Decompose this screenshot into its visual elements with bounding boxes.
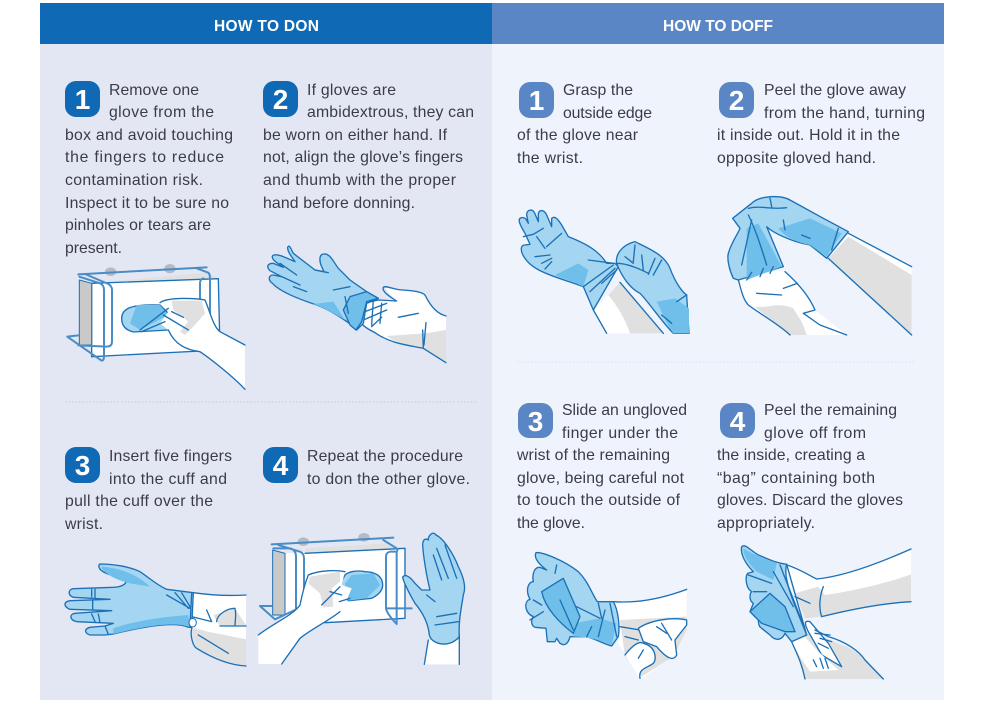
don step 1 text: pinholes or tears are [65,217,211,234]
illustration: aligning glove with hand [265,246,446,363]
doff step 2 text: from the hand, turning [764,105,925,122]
doff step 4 text: glove off from [764,425,866,442]
doff step 4 text: gloves. Discard the gloves [717,492,903,509]
illustration: grasping glove edge at wrist [519,210,689,333]
doff step 4 text: the inside, creating a [717,447,865,464]
don step 3 text: pull the cuff over the [65,493,213,510]
doff step 4 text: 4 [730,406,746,437]
doff step 1 text: of the glove near [517,127,638,144]
doff step 2 text: Peel the glove away [764,82,906,99]
don step 1 text [65,81,233,257]
doff step 3 text: the glove. [517,515,585,532]
don step 1 text: Inspect it to be sure no [65,195,229,212]
don step 2 text: ambidextrous, they can [307,104,474,121]
doff step 4 text [717,402,903,532]
doff step 3 text: to touch the outside of [517,492,681,509]
don step 3 text [64,447,232,533]
doff step 2 text [717,82,925,167]
heading: how to don: HOW TO DON [214,18,319,35]
doff step 2 text: it inside out. Hold it in the [717,127,900,144]
don step 3 text: wrist. [64,516,103,533]
doff step 4 text: Peel the remaining [764,402,897,419]
heading: how to don [40,3,492,44]
doff step 2 text: opposite gloved hand. [717,150,876,167]
doff step 3 text: 3 [528,406,543,437]
don step 2 text: be worn on either hand. If [263,127,448,144]
illustration: pulling cuff over wrist [65,564,246,666]
don step 1 text: box and avoid touching [65,127,233,144]
don step 3 text: Insert five fingers [109,448,232,465]
don step 2 text [263,81,474,212]
doff step 3 text: glove, being careful not [517,470,685,487]
doff step 1 text: Grasp the [563,82,633,99]
panel: how to don [40,3,492,700]
doff step 1 text: 1 [529,85,544,116]
illustration: peeling remaining glove off [741,546,911,679]
doff step 3 text: wrist of the remaining [516,447,670,464]
don step 1 text: Remove one [109,82,199,99]
doff step 1 text [517,82,652,167]
illustration: peeling glove inside out [728,197,912,335]
don step 1 text: glove from the [109,104,214,121]
don step 2 text: 2 [273,84,288,115]
heading: how to doff: HOW TO DOFF [663,18,773,35]
doff step 4 text: “bag” containing both [717,470,875,487]
doff step 2 text: 2 [729,85,744,116]
doff step 1 text: outside edge [563,105,652,122]
don step 1 text: present. [65,240,122,257]
illustration: taking glove from box [67,264,245,389]
heading: how to doff [492,3,944,44]
doff step 3 text: Slide an ungloved [562,402,687,419]
illustration: box and gloved hand [258,533,465,664]
doff step 3 text [516,402,687,532]
don step 1 text: 1 [75,84,90,115]
doff step 4 text: appropriately. [717,515,815,532]
doff step 3 text: finger under the [562,425,678,442]
don step 4 text: to don the other glove. [307,471,470,488]
don step 4 text: 4 [273,450,289,481]
don step 1 text: the fingers to reduce [65,149,224,166]
panel: how to doff [492,3,944,700]
don step 4 text [263,447,470,488]
don step 1 text: contamination risk. [65,172,203,189]
don step 2 text: If gloves are [307,82,396,99]
don step 3 text: into the cuff and [109,471,227,488]
don step 4 text: Repeat the procedure [307,448,463,465]
don step 2 text: not, align the glove’s fingers [263,149,463,166]
don step 3 text: 3 [75,450,90,481]
illustration: sliding finger under wrist [526,553,687,678]
doff step 1 text: the wrist. [517,150,583,167]
don step 2 text: and thumb with the proper [263,172,456,189]
don step 2 text: hand before donning. [263,195,415,212]
